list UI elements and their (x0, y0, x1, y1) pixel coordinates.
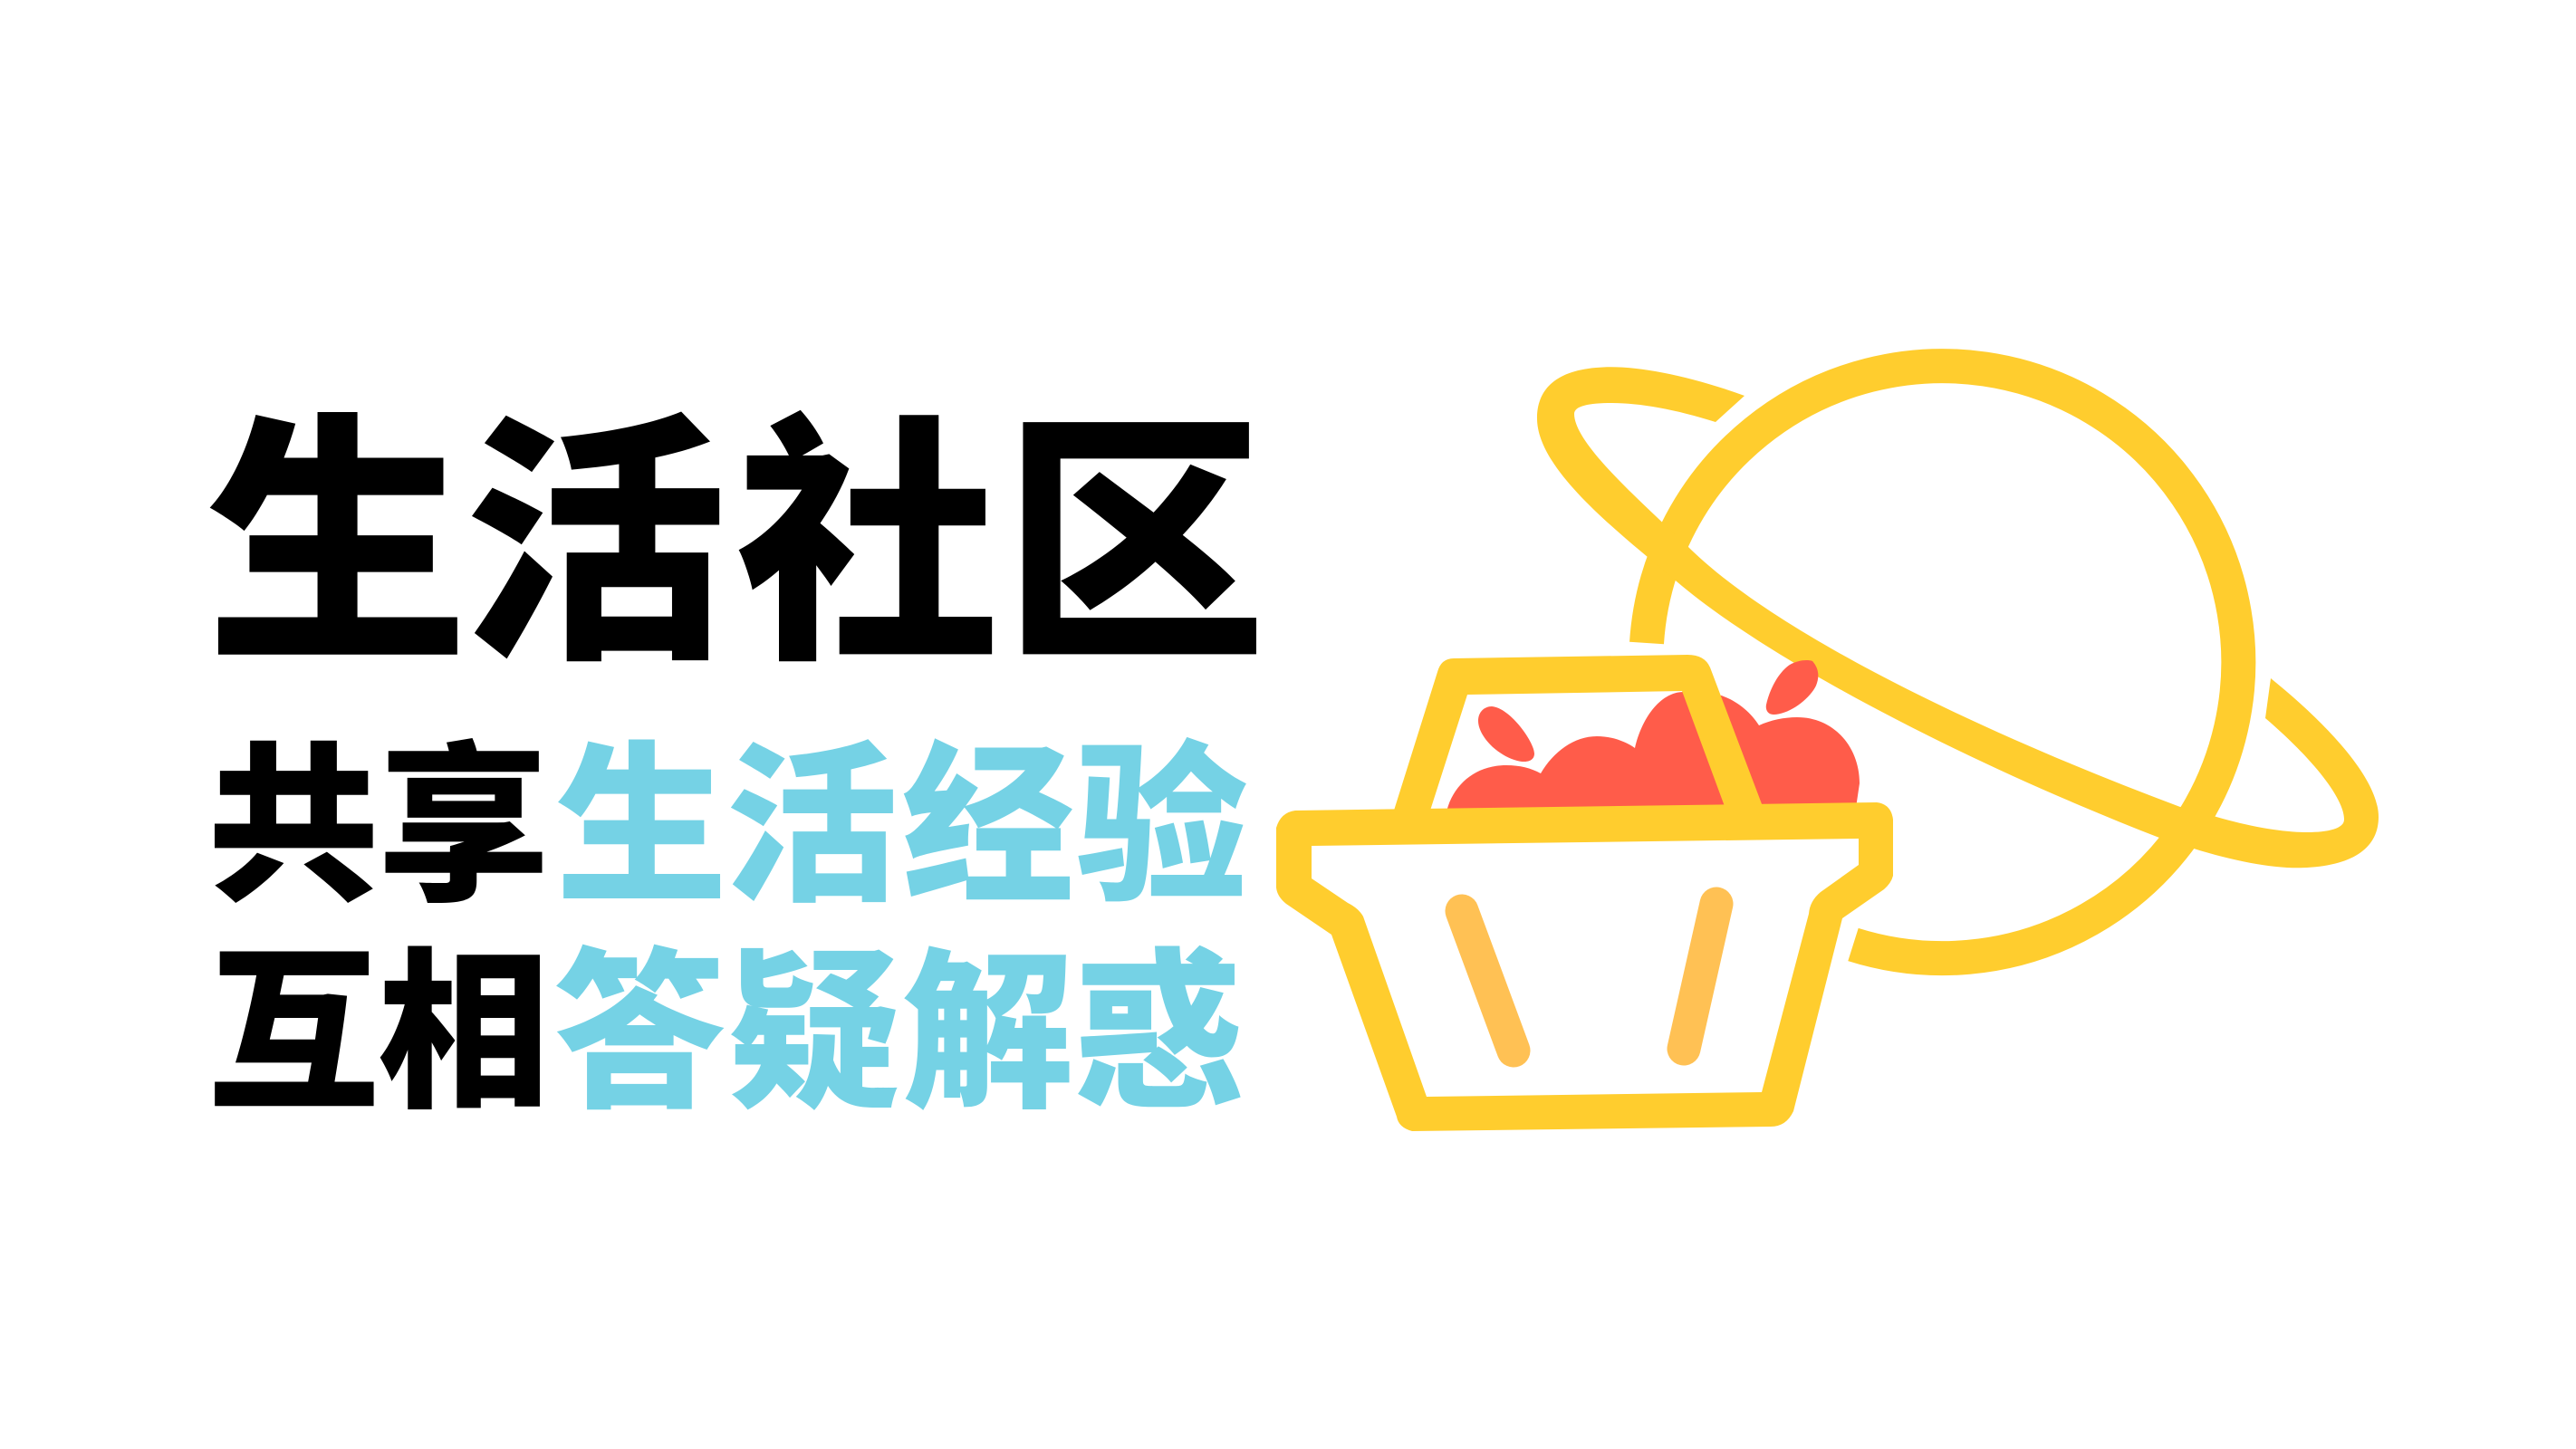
icon: planet and basket (1276, 366, 2379, 1131)
subtitle line 1: 共享 (207, 732, 550, 924)
subtitle line 2: 答疑解惑 (553, 938, 1245, 1130)
icon: basket body (1276, 802, 1893, 1131)
icon: fruit leaf right (1766, 660, 1818, 715)
title: 生活社区 (206, 399, 1266, 693)
icon: planet body (1647, 366, 2238, 958)
icon: planet ring (1537, 367, 2379, 868)
icon: fruit in basket (1447, 692, 1860, 811)
icon: basket slot right (1684, 904, 1716, 1049)
icon: basket handle (1393, 655, 1764, 813)
subtitle line 2: 互相 (207, 938, 550, 1130)
subtitle line 1: 生活经验 (555, 732, 1248, 924)
icon: basket slot left (1462, 911, 1514, 1051)
icon: fruit leaf left (1478, 706, 1534, 762)
